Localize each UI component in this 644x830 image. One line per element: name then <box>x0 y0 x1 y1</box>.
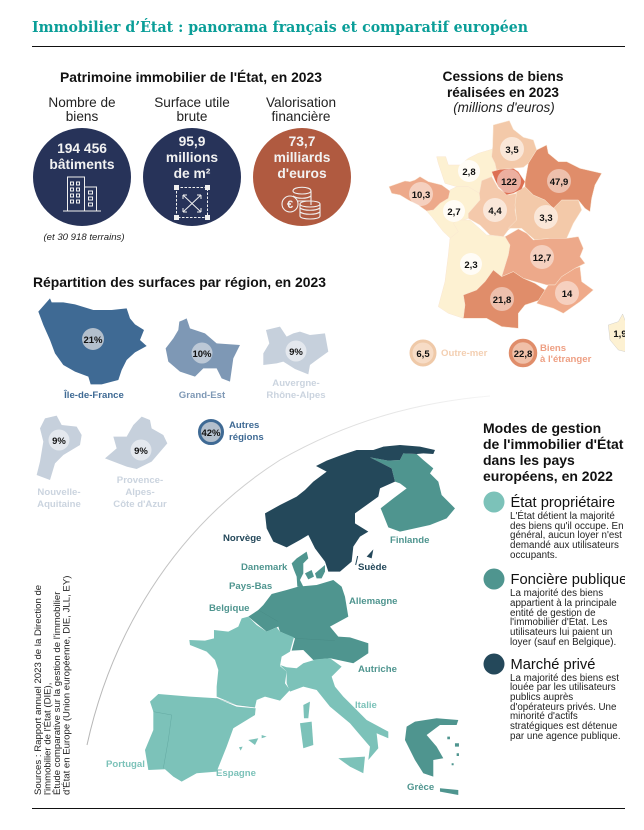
region: autres régions: Autres <box>229 420 259 431</box>
metric: valorisation financière: Valorisation <box>266 95 336 110</box>
metric: nombre de biens: (et 30 918 terrains) <box>43 232 125 243</box>
country labels: Danemark <box>241 562 288 573</box>
map values: France: 2,7 <box>447 207 461 218</box>
region: Nouvelle-Aquitaine <box>37 430 81 510</box>
title: Immobilier d’État : panorama français et comparatif européen <box>32 18 528 36</box>
legend: Marché privé: Marché privé <box>510 657 595 673</box>
legend: Marché privé: par une agence publique. <box>510 731 621 742</box>
region: Nouvelle-Aquitaine: Aquitaine <box>37 499 81 510</box>
heading: modes de gestion <box>483 420 624 484</box>
legend: Foncière publique: appartient à la principale <box>510 598 617 609</box>
metric: valorisation financière: 73,7 <box>289 134 316 149</box>
sources: Sources : Rapport annuel 2023 de la Direction de <box>33 585 44 795</box>
legend: Foncière publique <box>484 568 627 648</box>
region: Auvergne-Rhône-Alpes: Rhône-Alpes <box>266 390 326 401</box>
region: autres régions: 42% <box>201 428 221 439</box>
metric: surface utile brute: Surface utile <box>154 95 230 110</box>
legend: outre-mer: 6,5 <box>416 349 430 360</box>
metric: valorisation financière <box>253 95 351 226</box>
region: PACA: Provence- <box>117 475 163 486</box>
metric: valorisation financière: d'euros <box>277 166 327 181</box>
legend: Foncière publique: entité de gestion de <box>510 608 596 619</box>
region: Grand-Est: Grand-Est <box>179 390 226 401</box>
country labels: Norvège <box>223 533 261 544</box>
legend: biens à l'étranger <box>510 340 592 366</box>
arc: horizon line <box>87 396 490 745</box>
metric: nombre de biens: biens <box>66 109 98 124</box>
country labels: Finlande <box>390 535 429 546</box>
map values: France: 47,9 <box>550 177 568 188</box>
region: Nouvelle-Aquitaine: Nouvelle- <box>37 487 81 498</box>
region: Île-de-France: 21% <box>83 335 103 346</box>
sources: d'État en Europe (Union européenne, DIE, JLL, EY) <box>62 576 72 795</box>
panel: patrimoine immobilier <box>33 69 351 243</box>
region: Grand-Est: 10% <box>192 349 212 360</box>
sources <box>33 576 72 795</box>
panel: cessions <box>389 68 630 366</box>
map values: France: 122 <box>501 177 517 188</box>
metric: valorisation financière: financière <box>272 109 330 124</box>
panel: cessions: (millions d'euros) <box>453 100 555 115</box>
legend: biens à l'étranger: Biens <box>540 343 566 354</box>
region: Île-de-France: Île-de-France <box>63 389 124 401</box>
country labels: Portugal <box>106 759 145 770</box>
icon: buildings <box>63 177 101 211</box>
sources: l'immobilier de l'État (DIE), <box>42 683 54 795</box>
country group: foncière publique <box>248 552 459 795</box>
region: Auvergne-Rhône-Alpes <box>266 340 326 401</box>
legend: Foncière publique: l'immobilier d'État. Les <box>510 617 607 628</box>
icon: coins: € <box>287 199 293 211</box>
legend: État propriétaire: occupants. <box>510 550 557 561</box>
metric: nombre de biens: 194 456 <box>57 141 107 156</box>
region: autres régions <box>200 420 264 444</box>
metric: nombre de biens: Nombre de <box>48 95 116 110</box>
country labels: Grèce <box>407 782 434 793</box>
map values: France: 3,5 <box>505 145 519 156</box>
heading: répartition: Répartition des surfaces par région, en 2023 <box>33 274 326 290</box>
metric: valorisation financière: milliards <box>274 150 331 165</box>
heading: modes de gestion: Modes de gestion <box>483 420 601 436</box>
legend: Marché privé: La majorité des biens est <box>510 673 619 684</box>
region: Île-de-France <box>63 328 124 401</box>
panel: cessions: réalisées en 2023 <box>447 84 559 100</box>
country labels <box>106 533 434 793</box>
map values: France: 2,3 <box>464 260 478 271</box>
map: Europe <box>145 552 459 795</box>
metric: surface utile brute: 95,9 <box>179 134 206 149</box>
map values: France: 12,7 <box>533 253 551 264</box>
region: autres régions: régions <box>229 432 264 443</box>
sources: Étude comparative sur la gestion de l'immobilier <box>52 591 63 795</box>
map values: France: 10,3 <box>412 190 430 201</box>
country labels: Belgique <box>209 603 250 614</box>
legend: biens à l'étranger: à l'étranger <box>540 354 592 365</box>
country labels: Espagne <box>216 768 256 779</box>
countries: Norvège et Suède <box>265 445 435 572</box>
legend: Marché privé: d'opérateurs privés. Une <box>510 702 617 713</box>
metric: surface utile brute: brute <box>177 109 207 124</box>
panel: répartition des surfaces <box>33 274 328 510</box>
legend: État propriétaire: État propriétaire <box>510 494 615 511</box>
legend: Marché privé: louée par les utilisateurs <box>510 682 616 693</box>
legend: Foncière publique: loyer (sauf en Belgique). <box>510 637 616 648</box>
metric: surface utile brute: millions <box>166 150 218 165</box>
map values: France: 4,4 <box>488 206 502 217</box>
legend: État propriétaire: des biens qu'il occupe. En <box>510 521 624 532</box>
region: Nouvelle-Aquitaine: 9% <box>52 436 66 447</box>
legend: Marché privé: minorité d'actifs <box>510 711 578 722</box>
country labels: Autriche <box>358 664 397 675</box>
map values: France: 1,9 <box>613 329 627 340</box>
country: Finlande <box>370 453 455 532</box>
legend: Foncière publique: La majorité des biens <box>510 588 603 599</box>
country labels: Allemagne <box>349 596 398 607</box>
legend: Marché privé: stratégiques est détenue <box>510 721 618 732</box>
metric: surface utile brute <box>143 95 241 226</box>
heading: modes de gestion: dans les pays <box>483 452 575 468</box>
map values: France: 21,8 <box>493 295 511 306</box>
legend: outre-mer: Outre-mer <box>441 348 488 359</box>
legend: biens à l'étranger: 22,8 <box>514 349 532 360</box>
legend: État propriétaire: demandé aux utilisateurs <box>510 540 619 551</box>
region: PACA: Côte d'Azur <box>113 499 167 510</box>
region shapes <box>37 298 328 480</box>
country labels: Pays-Bas <box>229 581 272 592</box>
map values: France: 14 <box>562 289 573 300</box>
map: France <box>389 121 630 352</box>
heading: modes de gestion: européens, en 2022 <box>483 468 613 484</box>
legend: Marché privé <box>484 654 621 742</box>
legend: Foncière publique: utilisateurs lui paient un <box>510 627 612 638</box>
map values: France: 3,3 <box>539 213 553 224</box>
legend: outre-mer <box>411 341 488 365</box>
region: PACA: 9% <box>134 446 148 457</box>
metric: nombre de biens: bâtiments <box>49 157 115 172</box>
map: Nordic countries <box>265 445 455 572</box>
region: PACA <box>113 440 167 510</box>
legend: Foncière publique: Foncière publique <box>510 572 627 588</box>
region: Grand-Est <box>179 342 226 401</box>
region: Auvergne-Rhône-Alpes: 9% <box>289 347 303 358</box>
heading: patrimoine: Patrimoine immobilier de l'État, en 2023 <box>60 69 322 85</box>
panel: modes de gestion <box>483 420 627 742</box>
metric: surface utile brute: de m² <box>174 166 211 181</box>
country group: État propriétaire <box>145 617 388 782</box>
metric: nombre de biens <box>33 95 131 243</box>
region: Auvergne-Rhône-Alpes: Auvergne- <box>272 378 320 389</box>
country labels: Italie <box>355 700 377 711</box>
region: PACA: Alpes- <box>125 487 155 498</box>
legend: État propriétaire: général, aucun loyer n'est <box>510 530 622 541</box>
legend: État propriétaire <box>484 492 624 561</box>
heading: modes de gestion: de l'immobilier d'État <box>483 436 624 452</box>
legend: État propriétaire: L'État détient la majorité <box>510 511 615 522</box>
country labels: Suède <box>358 562 387 573</box>
map values: France: 2,8 <box>462 167 476 178</box>
heading: cessions: Cessions de biens <box>442 68 564 84</box>
map values: France <box>409 137 627 340</box>
icon: surface arrows <box>174 185 210 220</box>
legend: Marché privé: publics auprès <box>510 692 573 703</box>
